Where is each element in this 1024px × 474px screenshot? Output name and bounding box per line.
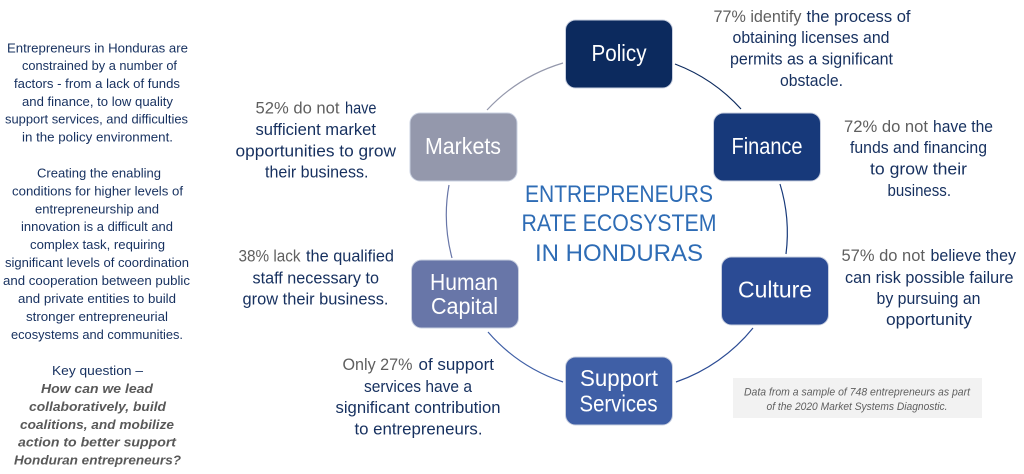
- text block: enabling conditions paragraph: significant levels of coordination: [5, 255, 189, 270]
- text block: constraints paragraph: in the policy environment.: [22, 130, 173, 144]
- text block: enabling conditions paragraph: ecosystems and communities.: [11, 327, 183, 342]
- italic question: action to better support: [18, 434, 177, 450]
- node: Support Services: [566, 357, 672, 425]
- stat: policy 77%: [714, 8, 911, 90]
- title: ENTREPRENEURS: [525, 181, 713, 208]
- text block: constraints paragraph: Entrepreneurs in Honduras are: [7, 40, 188, 56]
- node: Human Capital: Capital: [431, 293, 498, 319]
- stat: policy 77%: permits as a significant: [730, 50, 893, 68]
- stat: finance 72%: [844, 118, 993, 200]
- node: Markets: [410, 113, 517, 181]
- text block: key question: [14, 363, 181, 468]
- stat: policy 77%: 77% identify: [714, 8, 802, 26]
- title: [522, 181, 716, 267]
- stat: markets 52%: [236, 100, 396, 182]
- source note: [733, 378, 982, 418]
- stat: markets 52%: 52% do not: [256, 100, 340, 118]
- node: Culture: [722, 257, 828, 325]
- italic question: Honduran entrepreneurs?: [14, 452, 181, 468]
- node: Policy: Policy: [592, 40, 647, 66]
- stat: culture 57%: 57% do not: [842, 247, 925, 265]
- stat: finance 72%: have the: [933, 118, 993, 136]
- stat: support services 27%: Only 27%: [342, 356, 413, 374]
- stat: markets 52%: have: [345, 100, 376, 118]
- text block: constraints paragraph: support services, and difficulties: [5, 112, 188, 126]
- panel: intro text column: [3, 40, 190, 468]
- text block: constraints paragraph: and finance, to low quality: [22, 94, 173, 109]
- text block: enabling conditions paragraph: innovation is a difficult and: [21, 219, 173, 234]
- node: Human Capital: [412, 260, 518, 328]
- stat: support services 27%: services have a: [364, 378, 473, 396]
- node: Human Capital: Human: [430, 269, 498, 295]
- stat: finance 72%: funds and financing: [850, 139, 987, 157]
- text block: key question: Key question –: [52, 363, 144, 378]
- stat: finance 72%: 72% do not: [844, 118, 928, 136]
- italic question: [14, 381, 181, 468]
- stat: markets 52%: sufficient market: [256, 121, 376, 139]
- cycle ring connecting arcs: [446, 63, 787, 382]
- stat: culture 57%: [842, 247, 1017, 329]
- stat: human capital 38%: [238, 248, 394, 308]
- stat: finance 72%: to grow their: [870, 160, 968, 178]
- text block: constraints paragraph: [5, 40, 188, 144]
- text block: enabling conditions paragraph: stronger entrepreneurial: [26, 309, 168, 324]
- stat: human capital 38%: 38% lack: [238, 248, 301, 266]
- stat: human capital 38%: staff necessary to: [252, 270, 379, 288]
- text block: enabling conditions paragraph: Creating the enabling: [37, 166, 161, 180]
- stat: support services 27%: [336, 356, 500, 438]
- node: Support Services: Support: [580, 365, 658, 391]
- stat: human capital 38%: grow their business.: [242, 290, 388, 308]
- text block: enabling conditions paragraph: and cooperation between public: [3, 273, 190, 288]
- stat: support services 27%: to entrepreneurs.: [354, 420, 482, 438]
- node: Finance: Finance: [732, 133, 802, 159]
- title: IN HONDURAS: [535, 240, 703, 267]
- text block: enabling conditions paragraph: conditions for higher levels of: [12, 184, 183, 198]
- stat: human capital 38%: the qualified: [306, 248, 394, 266]
- text block: constraints paragraph: factors - from a lack of funds: [14, 76, 180, 91]
- stat: culture 57%: believe they: [930, 247, 1017, 265]
- stat: policy 77%: obtaining licenses and: [732, 29, 890, 47]
- stat: culture 57%: opportunity: [886, 311, 973, 329]
- node: Finance: [714, 113, 820, 181]
- text block: enabling conditions paragraph: complex task, requiring: [30, 237, 165, 252]
- stat: finance 72%: business.: [888, 182, 951, 200]
- source note: of the 2020 Market Systems Diagnostic.: [766, 401, 948, 413]
- stat: support services 27%: significant contribution: [336, 399, 500, 417]
- stat: support services 27%: of support: [418, 356, 494, 374]
- text block: enabling conditions paragraph: and private entities to build: [18, 291, 176, 306]
- italic question: coalitions, and mobilize: [20, 417, 174, 432]
- stat: markets 52%: their business.: [265, 164, 368, 182]
- stat: markets 52%: opportunities to grow: [236, 142, 396, 160]
- stat: policy 77%: obstacle.: [780, 72, 843, 90]
- node: Culture: Culture: [738, 276, 812, 302]
- node: Policy: [566, 20, 672, 88]
- stat: culture 57%: can risk possible failure: [845, 269, 1014, 287]
- text block: enabling conditions paragraph: [3, 166, 190, 342]
- node: Support Services: Services: [580, 390, 658, 416]
- italic question: collaboratively, build: [29, 399, 167, 414]
- title: RATE ECOSYSTEM: [522, 210, 716, 237]
- stat: policy 77%: the process of: [806, 8, 911, 26]
- source note: Data from a sample of 748 entrepreneurs as part: [744, 386, 971, 398]
- node: Markets: Markets: [425, 133, 501, 159]
- text block: constraints paragraph: constrained by a number of: [22, 58, 177, 73]
- text block: enabling conditions paragraph: entrepreneurship and: [35, 202, 159, 216]
- italic question: How can we lead: [41, 381, 154, 396]
- stat: culture 57%: by pursuing an: [876, 290, 980, 308]
